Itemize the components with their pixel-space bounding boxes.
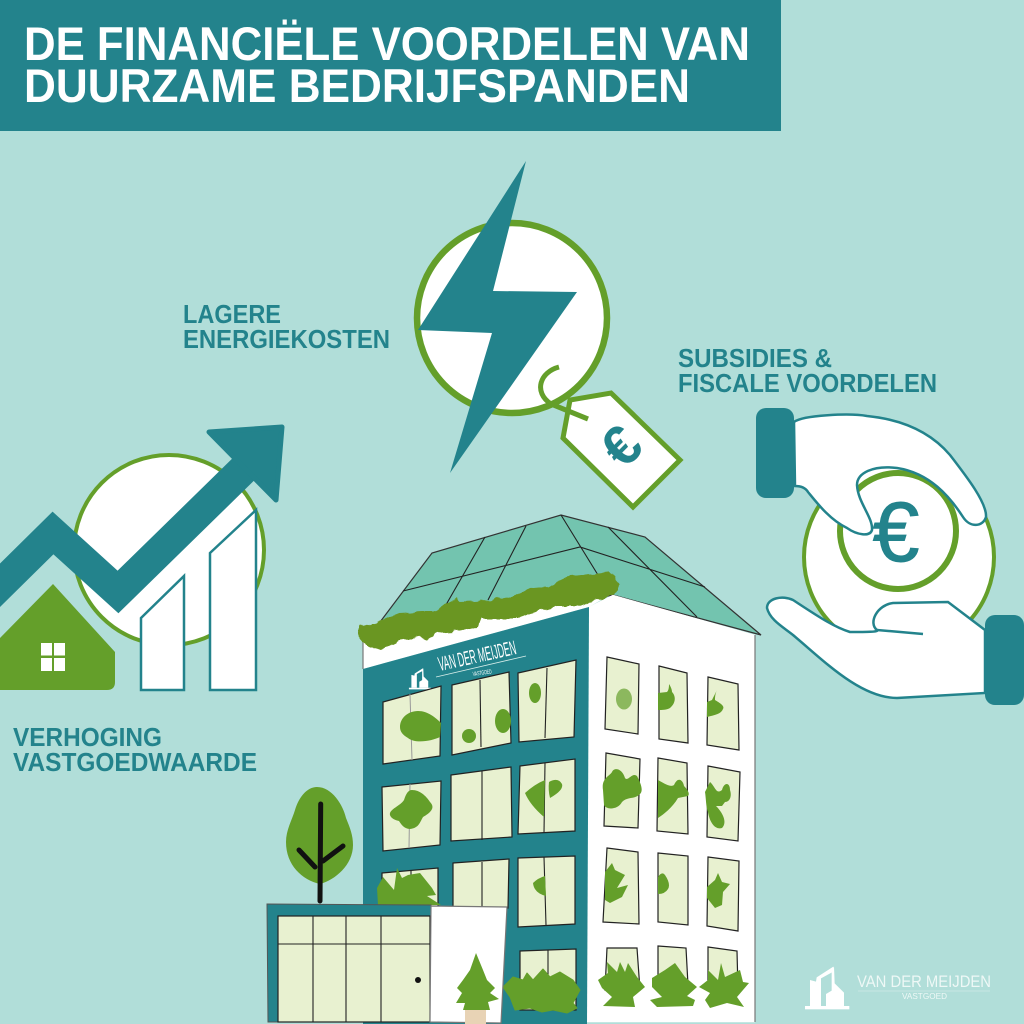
label: subsidies en fiscale voordelen bbox=[678, 345, 937, 398]
shrubs bbox=[377, 868, 749, 1013]
icon: rising arrow bbox=[0, 427, 282, 600]
panel: verhoging vastgoedwaarde bbox=[0, 427, 282, 777]
icon: value circle bbox=[74, 455, 264, 645]
label: verhoging vastgoedwaarde: VERHOGING bbox=[13, 724, 162, 752]
label: subsidies en fiscale voordelen: SUBSIDIES & bbox=[678, 345, 832, 373]
panel: subsidies en fiscale voordelen bbox=[678, 345, 1024, 705]
logo: van der meijden vastgoed: VASTGOED bbox=[902, 991, 947, 1001]
label: verhoging vastgoedwaarde bbox=[13, 724, 257, 777]
front wall bbox=[363, 607, 589, 1024]
icon: house bbox=[0, 584, 115, 690]
building outlines bbox=[363, 635, 755, 1022]
icon: energy circle bbox=[417, 223, 607, 413]
icon: short bar bbox=[141, 576, 184, 690]
icon: bottom hand bbox=[767, 598, 1024, 705]
title banner: DE FINANCIËLE VOORDELEN VAN bbox=[24, 18, 750, 71]
side windows bbox=[603, 657, 740, 990]
facade logo bbox=[409, 637, 526, 689]
tree bbox=[286, 787, 353, 901]
logo: van der meijden vastgoed bbox=[805, 967, 991, 1009]
label: verhoging vastgoedwaarde: VASTGOEDWAARDE bbox=[13, 749, 257, 777]
white door panel bbox=[430, 906, 507, 1023]
label: subsidies en fiscale voordelen: FISCALE VOORDELEN bbox=[678, 370, 937, 398]
icon: coin with euro: € bbox=[873, 485, 919, 579]
green roof moss bbox=[360, 574, 618, 648]
icon: tall bar bbox=[210, 510, 256, 690]
door knob bbox=[415, 977, 421, 983]
facade logo: VASTGOED bbox=[472, 669, 492, 678]
front windows bbox=[382, 660, 576, 1010]
title banner: DUURZAME BEDRIJFSPANDEN bbox=[24, 60, 690, 113]
building illustration: VAN DER MEIJDEN bbox=[436, 637, 518, 676]
wall edge band bbox=[363, 593, 613, 669]
icon: outer circle bbox=[804, 462, 994, 652]
panel: lagere energiekosten bbox=[183, 161, 680, 507]
icon: lightning bolt bbox=[418, 161, 577, 473]
roof bbox=[377, 515, 761, 635]
entrance pavilion bbox=[267, 904, 507, 1024]
icon: coin with euro bbox=[840, 473, 956, 589]
icon: price tag: € bbox=[588, 413, 654, 479]
building illustration bbox=[360, 515, 761, 1024]
plant pot bbox=[465, 1010, 486, 1024]
logo: van der meijden vastgoed: VAN DER MEIJDEN bbox=[857, 972, 991, 991]
label: lagere energiekosten: ENERGIEKOSTEN bbox=[183, 326, 390, 354]
small fir tree bbox=[456, 953, 499, 1010]
label: lagere energiekosten bbox=[183, 301, 390, 354]
side wall bbox=[587, 595, 755, 1022]
label: lagere energiekosten: LAGERE bbox=[183, 301, 281, 329]
window plants bbox=[390, 683, 731, 908]
icon: price tag bbox=[541, 367, 680, 507]
icon: top hand bbox=[756, 408, 986, 534]
title banner bbox=[0, 0, 781, 131]
